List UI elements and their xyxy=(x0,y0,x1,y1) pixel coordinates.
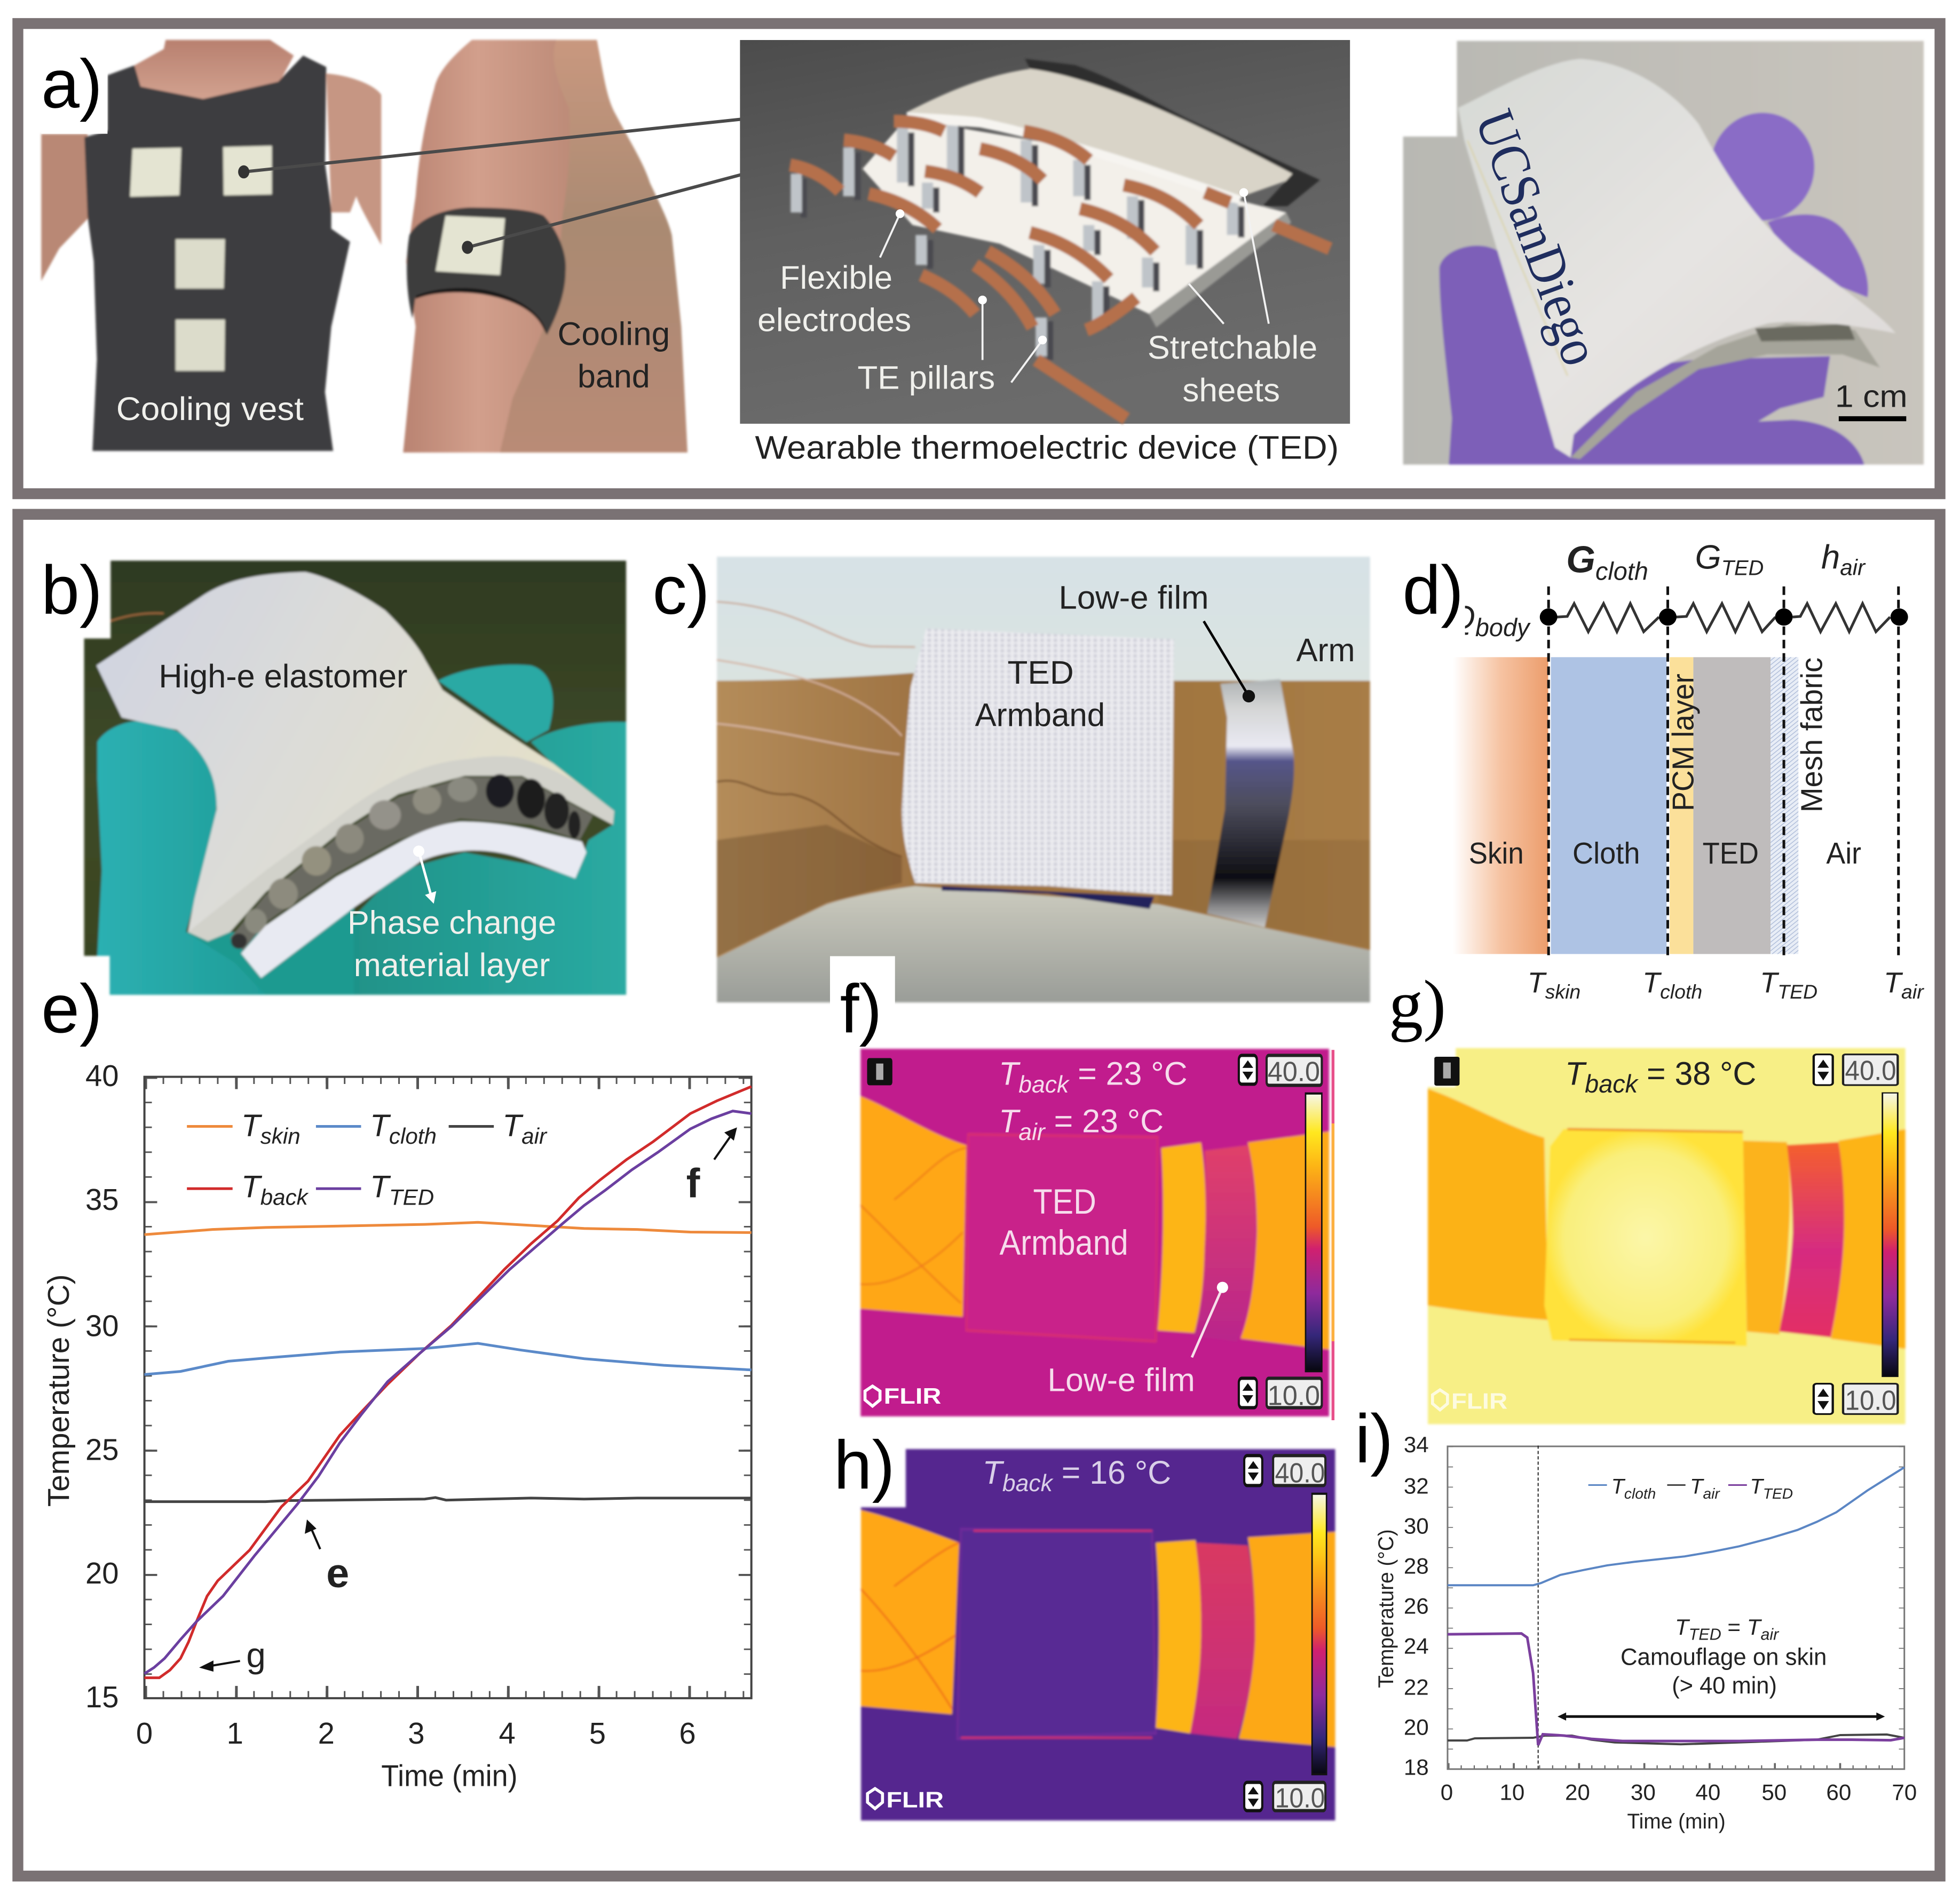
text: T back = 23: back xyxy=(1018,1072,1070,1098)
text: layer names xyxy=(1469,836,1861,870)
legend text: air xyxy=(521,1123,548,1149)
label: e): e) xyxy=(41,970,102,1047)
text: G TED: G xyxy=(1695,539,1721,576)
text: TED Armband: Armband xyxy=(975,697,1105,733)
text: temperature node labels: cloth xyxy=(1660,980,1702,1003)
annotation letters: g xyxy=(246,1636,266,1675)
x axis numbers: 2 xyxy=(318,1716,335,1750)
text: Flexible electrodes: electrodes xyxy=(757,302,911,338)
text: T back = 38: T xyxy=(1565,1056,1585,1092)
annotation: Camouflage on skin: (> 40 min) xyxy=(1672,1673,1777,1699)
annotation letters: e xyxy=(326,1550,349,1596)
range values xyxy=(1845,1055,1896,1416)
text: TED Armband xyxy=(975,654,1105,733)
logo: FLIR: FLIR xyxy=(886,1787,944,1812)
text: layer names: TED xyxy=(1703,836,1759,870)
legend text: skin xyxy=(260,1123,301,1149)
legend text: air xyxy=(1703,1485,1720,1502)
diagram d: thermal resistance layer model xyxy=(1448,539,1924,1003)
range values: 10.0 xyxy=(1268,1380,1320,1411)
text: T back = 38: = 38 °C xyxy=(1638,1056,1756,1092)
legend text xyxy=(241,1109,548,1210)
x axis numbers: 1 xyxy=(227,1716,243,1750)
x axis numbers: 70 xyxy=(1892,1779,1917,1804)
legend lines xyxy=(1588,1484,1747,1486)
scale bar: 1 cm: 1 cm xyxy=(1835,379,1908,414)
logo: FLIR xyxy=(865,1383,941,1408)
label: h): h) xyxy=(834,1427,895,1503)
text: Flexible electrodes xyxy=(757,259,911,338)
series: T air xyxy=(1448,1735,1904,1744)
text: T back = 16: back xyxy=(1002,1470,1054,1497)
range values xyxy=(1275,1457,1325,1813)
text and pointer: Low-e film xyxy=(1047,1282,1228,1398)
legend text: T xyxy=(370,1170,389,1205)
text: layer names: Skin xyxy=(1469,836,1524,870)
text: Phase change material layer: material layer xyxy=(354,947,550,983)
label: g): g) xyxy=(1389,966,1446,1042)
connector lines from TED patches xyxy=(238,119,741,254)
series: T cloth xyxy=(1448,1467,1904,1585)
text: temperature node labels: T xyxy=(1528,967,1545,999)
line chart e: temperature versus time xyxy=(42,1059,752,1793)
legend text: TED xyxy=(389,1185,434,1210)
range values: 40.0 xyxy=(1845,1055,1896,1086)
text: Cooling band xyxy=(557,315,670,394)
legend text: T xyxy=(241,1170,260,1205)
series: T TED xyxy=(1448,1634,1904,1745)
text and pointer: Low-e film: Low-e film xyxy=(1047,1362,1195,1398)
y axis numbers xyxy=(85,1059,118,1714)
legend text: cloth xyxy=(1624,1485,1656,1502)
logo: FLIR xyxy=(867,1787,944,1812)
text: T back = 23: T xyxy=(999,1056,1018,1092)
arrow: phase change layer pointer xyxy=(413,845,436,904)
x axis numbers: 0 xyxy=(136,1716,153,1750)
axis title: Time (min): Time (min) xyxy=(381,1759,518,1793)
text: UCSanDiego: UCSanDiego xyxy=(1464,102,1611,373)
text: TED Armband: Armband xyxy=(1000,1223,1128,1262)
range values xyxy=(1268,1056,1320,1411)
text: PCM layer: PCM layer xyxy=(1666,674,1700,811)
text: temperature node labels: T xyxy=(1760,967,1777,999)
text: G cloth: G xyxy=(1566,539,1595,581)
text: h air: h xyxy=(1821,539,1840,576)
y axis numbers: 34 xyxy=(1404,1432,1429,1457)
text: layer names: Air xyxy=(1826,836,1861,870)
legend lines xyxy=(187,1126,494,1189)
y axis numbers: 40 xyxy=(85,1059,118,1093)
label: d): d) xyxy=(1403,552,1464,629)
legend text: T xyxy=(1750,1475,1763,1499)
range values: 10.0 xyxy=(1845,1385,1896,1416)
series: T TED xyxy=(145,1111,752,1674)
x axis numbers: 20 xyxy=(1565,1779,1590,1804)
text: temperature node labels: T xyxy=(1884,967,1901,999)
text: Arm: Arm xyxy=(1296,632,1355,668)
text: Mesh fabric: Mesh fabric xyxy=(1795,658,1829,812)
y axis numbers: 22 xyxy=(1404,1675,1429,1700)
label: f) xyxy=(830,956,895,1047)
series: T cloth xyxy=(145,1343,752,1374)
photo b: device with phase change layer xyxy=(84,561,626,995)
y axis numbers xyxy=(1404,1432,1429,1779)
annotation: T TED = T air: air xyxy=(1760,1626,1780,1644)
text: Phase change material layer xyxy=(347,904,556,983)
colour bar and range buttons xyxy=(1434,1055,1898,1414)
panel: lower frame xyxy=(18,514,1940,1876)
text: T back = 38: back xyxy=(1585,1070,1639,1098)
text: G cloth: cloth xyxy=(1595,558,1648,585)
axis title: Time (min): Time (min) xyxy=(1627,1810,1726,1833)
text: G TED: TED xyxy=(1721,556,1764,580)
axis title: Temperature: Temperature (°C) xyxy=(42,1274,75,1507)
text: Q body: Q xyxy=(1450,599,1475,636)
text: Stretchable sheets xyxy=(1148,329,1317,408)
caption: Wearable thermoelectric device (TED): Wearable thermoelectric device (TED) xyxy=(755,429,1339,465)
text: T air = 23: T xyxy=(999,1103,1018,1139)
text: T back = 16: T xyxy=(983,1454,1002,1491)
series: T back xyxy=(145,1087,752,1678)
logo: FLIR: FLIR xyxy=(884,1383,941,1408)
annotation: T TED = T air: TED xyxy=(1689,1626,1721,1644)
y axis numbers: 28 xyxy=(1404,1553,1429,1578)
text: temperature node labels: air xyxy=(1901,980,1924,1003)
y axis numbers: 35 xyxy=(85,1183,118,1216)
x axis numbers: 40 xyxy=(1695,1779,1720,1804)
annotation: T TED = T air: T xyxy=(1675,1614,1689,1640)
annotation letters: f xyxy=(686,1161,700,1207)
thermal image f xyxy=(860,1049,1334,1420)
image: arm with cooling band xyxy=(403,40,687,453)
label: a): a) xyxy=(41,45,102,122)
logo: FLIR: FLIR xyxy=(1451,1388,1507,1413)
legend text: T xyxy=(1611,1475,1624,1499)
y axis numbers: 32 xyxy=(1404,1474,1429,1499)
arrow: low-e film pointer xyxy=(1204,621,1255,702)
photo: UC San Diego device held in glove xyxy=(1403,41,1924,465)
x axis numbers: 60 xyxy=(1826,1779,1851,1804)
legend text: back xyxy=(260,1185,309,1210)
text: Cooling band: Cooling xyxy=(557,315,670,352)
text: T air = 23: = 23 °C xyxy=(1045,1103,1164,1139)
text: temperature node labels xyxy=(1528,967,1924,1003)
text: Cooling band: band xyxy=(578,358,650,394)
text: Stretchable sheets: Stretchable xyxy=(1148,329,1317,366)
axis title: Temperature: Temperature (°C) xyxy=(1374,1529,1398,1688)
thermal image g xyxy=(1428,1048,1906,1424)
x axis numbers: 10 xyxy=(1499,1779,1524,1804)
text: Q body: body xyxy=(1475,614,1531,642)
annotation: T TED = T air: T xyxy=(1747,1614,1763,1640)
text: temperature node labels: TED xyxy=(1777,980,1817,1003)
colour bar and pink edge xyxy=(867,1050,1334,1420)
legend text: TED xyxy=(1763,1485,1793,1502)
x axis numbers: 30 xyxy=(1631,1779,1656,1804)
text: h air: air xyxy=(1840,555,1866,580)
annotation: Camouflage on skin xyxy=(1621,1644,1827,1699)
y axis numbers: 18 xyxy=(1404,1754,1429,1779)
thermal image h xyxy=(861,1449,1335,1820)
label: f): f) xyxy=(840,970,882,1047)
legend text: T xyxy=(370,1109,389,1143)
text: TE pillars: TE pillars xyxy=(857,359,995,395)
y axis numbers: 20 xyxy=(85,1556,118,1590)
panel: a frame xyxy=(18,23,1940,494)
legend text: T xyxy=(1690,1475,1703,1499)
text: temperature node labels: T xyxy=(1642,967,1660,999)
y axis numbers: 24 xyxy=(1404,1633,1429,1658)
photo c: TED armband on arm with low-e film xyxy=(717,557,1370,1002)
text: Cooling vest: Cooling vest xyxy=(116,391,304,427)
x axis numbers: 5 xyxy=(589,1716,606,1750)
x axis numbers xyxy=(1441,1779,1917,1804)
colour bar and range buttons xyxy=(1244,1455,1326,1811)
label: b): b) xyxy=(41,552,102,629)
x axis numbers xyxy=(136,1716,696,1750)
x axis numbers: 0 xyxy=(1441,1779,1453,1804)
legend text: T xyxy=(502,1109,521,1143)
text: Phase change material layer: Phase change xyxy=(347,904,556,940)
series: T air xyxy=(145,1498,752,1502)
text: Q body xyxy=(1448,599,1531,642)
text: Low-e film: Low-e film xyxy=(1059,580,1209,616)
x axis numbers: 6 xyxy=(679,1716,696,1750)
annotation: Camouflage on skin: Camouflage on skin xyxy=(1621,1644,1827,1670)
text: T back = 23: = 23 °C xyxy=(1069,1056,1188,1092)
y axis numbers: 25 xyxy=(85,1432,118,1466)
line chart i: camouflage on skin xyxy=(1374,1432,1917,1833)
text: High-e elastomer: High-e elastomer xyxy=(159,658,407,694)
logo: FLIR xyxy=(1433,1388,1507,1413)
label: c): c) xyxy=(652,552,710,629)
annotation letters xyxy=(246,1161,700,1675)
y axis numbers: 15 xyxy=(85,1680,118,1714)
illustration: wearable thermoelectric device xyxy=(740,40,1350,424)
text: layer names: Cloth xyxy=(1572,836,1640,870)
range values: 40.0 xyxy=(1268,1056,1320,1087)
range values: 40.0 xyxy=(1275,1457,1325,1488)
legend text xyxy=(1611,1475,1793,1502)
label: i): i) xyxy=(1355,1400,1393,1477)
image: cooling vest torso xyxy=(41,40,381,451)
text: T air = 23: air xyxy=(1018,1119,1046,1145)
y axis numbers: 26 xyxy=(1404,1593,1429,1618)
y axis numbers: 30 xyxy=(1404,1513,1429,1538)
y axis numbers: 30 xyxy=(85,1309,118,1342)
text: TED Armband: TED xyxy=(1008,654,1074,691)
legend text: T xyxy=(241,1109,260,1143)
legend text: cloth xyxy=(389,1123,437,1149)
text: Flexible electrodes: Flexible xyxy=(780,259,892,296)
text: TED Armband: TED xyxy=(1033,1182,1096,1221)
annotation arrows e f g xyxy=(199,1127,737,1672)
range values: 10.0 xyxy=(1275,1782,1325,1813)
annotation: T TED = T air: = xyxy=(1721,1614,1747,1640)
x axis numbers: 3 xyxy=(408,1716,424,1750)
series: T skin xyxy=(145,1222,752,1234)
text: Stretchable sheets: sheets xyxy=(1182,372,1280,408)
x axis numbers: 4 xyxy=(499,1716,516,1750)
text: TED Armband xyxy=(1000,1182,1128,1262)
text: temperature node labels: skin xyxy=(1545,980,1580,1003)
x axis numbers: 50 xyxy=(1761,1779,1787,1804)
y axis numbers: 20 xyxy=(1404,1715,1429,1740)
text: T back = 16: = 16 °C xyxy=(1053,1454,1171,1491)
double arrow: duration xyxy=(1558,1713,1885,1721)
